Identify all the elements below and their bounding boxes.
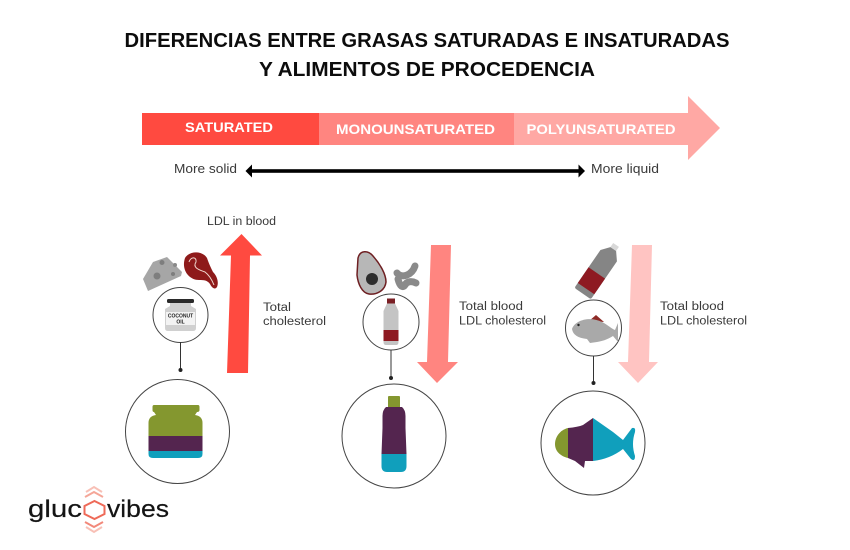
connector xyxy=(178,342,182,372)
logo: glucovibes xyxy=(28,487,169,532)
label: total cholesterol: Total xyxy=(263,302,291,314)
title xyxy=(124,30,730,81)
icon: nuts xyxy=(397,266,416,287)
arrow: up, red xyxy=(220,234,262,373)
segment: saturated: SATURATED xyxy=(185,119,273,135)
icon: composition fish xyxy=(555,418,635,468)
segment: polyunsaturated xyxy=(514,96,720,160)
large circle: fat composition fish xyxy=(541,391,645,495)
label: total blood LDL cholesterol: Total blood xyxy=(660,301,724,313)
icon: steak xyxy=(184,252,218,288)
icon: fish xyxy=(572,315,618,343)
label: more liquid: More liquid xyxy=(591,162,659,176)
double-headed arrow: solid to liquid xyxy=(246,164,585,178)
icon: coconut oil jar xyxy=(165,299,196,331)
icon: avocado xyxy=(357,252,386,294)
icon: composition bottle xyxy=(382,396,406,472)
title: DIFERENCIAS ENTRE GRASAS SATURADAS E INSATURADAS xyxy=(124,30,730,52)
arrow: down, pink xyxy=(618,245,658,383)
icon: cheese xyxy=(143,257,182,291)
segment: monounsaturated xyxy=(319,113,514,145)
logo wordmark xyxy=(28,496,169,523)
label: total blood LDL cholesterol: LDL cholesterol xyxy=(459,316,546,328)
icon: coconut oil jar: COCONUT xyxy=(168,314,193,320)
label: total blood LDL cholesterol: Total blood xyxy=(459,301,523,313)
column: monounsaturated xyxy=(342,245,546,488)
small circle: canola oil bottle xyxy=(363,294,419,350)
logo wordmark: gluc xyxy=(28,496,82,523)
column: polyunsaturated xyxy=(541,239,747,495)
label: more solid: More solid xyxy=(174,162,237,176)
small circle: fish xyxy=(566,300,622,356)
segment: saturated xyxy=(142,113,319,145)
column: saturated xyxy=(126,216,326,484)
label: total cholesterol: cholesterol xyxy=(263,316,326,328)
logo mark: pulse hexagon xyxy=(84,487,104,532)
icon: composition jar xyxy=(148,405,202,458)
large circle: fat composition jar xyxy=(126,380,230,484)
saturation scale arrow xyxy=(142,96,720,160)
connector xyxy=(592,356,596,385)
segment: monounsaturated: MONOUNSATURATED xyxy=(336,121,495,137)
icon: canola oil bottle xyxy=(384,298,398,345)
small circle: coconut oil jar xyxy=(153,288,208,342)
title: Y ALIMENTOS DE PROCEDENCIA xyxy=(259,59,595,81)
label: LDL in blood: LDL in blood xyxy=(207,216,276,228)
icon: safflower oil bottle xyxy=(574,239,624,299)
label: total blood LDL cholesterol: LDL cholesterol xyxy=(660,316,747,328)
large circle: fat composition bottle xyxy=(342,384,446,488)
arrow: down, salmon xyxy=(417,245,458,383)
connector xyxy=(389,350,393,380)
logo wordmark: vibes xyxy=(107,496,169,523)
segment: polyunsaturated: POLYUNSATURATED xyxy=(526,121,676,137)
icon: coconut oil jar: OIL xyxy=(176,320,185,326)
